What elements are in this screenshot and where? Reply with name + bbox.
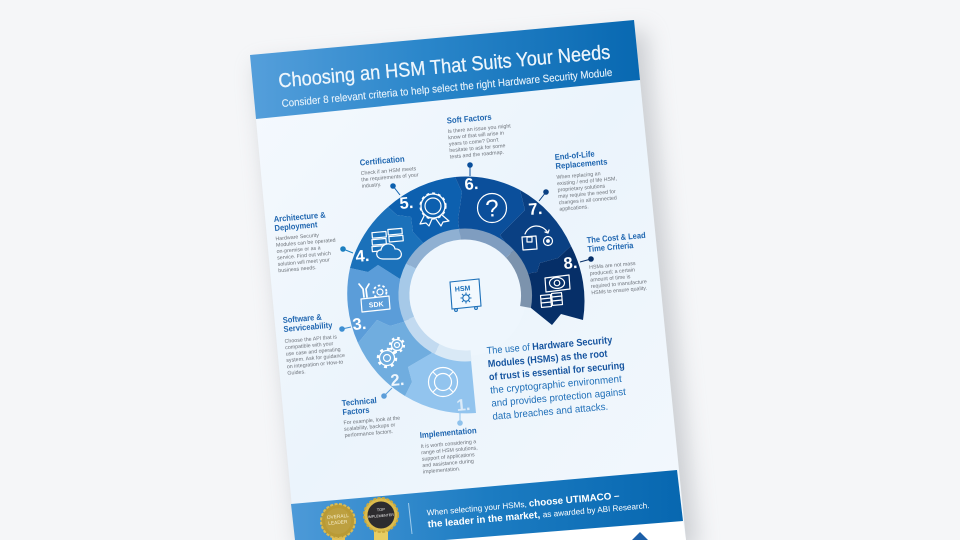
- text: main statement: Modules (HSMs) as the root: [487, 349, 609, 370]
- badge: top implementer: [364, 498, 398, 540]
- number 2: 2.: [390, 371, 405, 390]
- subtitle: Consider 8 relevant criteria to help select the right Hardware Security Module: [281, 67, 613, 110]
- text: implementation: and assistance during: [422, 459, 474, 469]
- badge: top implementer: TOP: [377, 507, 385, 512]
- text: software: [282, 310, 346, 377]
- text: implementation: range of HSM solutions,: [421, 445, 478, 456]
- number 1: 1.: [456, 396, 471, 415]
- icon: SDK toolbox: SDK: [369, 301, 384, 309]
- text: implementation: implementation.: [423, 466, 461, 475]
- pin 1: [458, 413, 462, 425]
- icon: HSM safe: HSM: [455, 285, 471, 294]
- text: cost and lead time: produced; a certain: [589, 267, 635, 277]
- segment 3: [347, 265, 410, 343]
- text: cost and lead time: Time Criteria: [587, 240, 634, 254]
- text: soft factors: years to come? Don't: [449, 137, 499, 148]
- text: main statement: The use of Hardware Security: [486, 335, 613, 357]
- text: architecture: Deployment: [274, 219, 318, 233]
- icon: gears: [378, 338, 404, 367]
- badge: overall leader: LEADER: [328, 519, 348, 527]
- text: certification: Certification: [359, 154, 405, 167]
- pin 4: [341, 247, 353, 253]
- icon: banknote and coins: [540, 275, 570, 307]
- segment 2: [358, 320, 432, 396]
- divider: [408, 503, 412, 534]
- text: main statement: [486, 334, 628, 423]
- text: architecture: Modules can be operated: [276, 238, 336, 249]
- banner text: as awarded by ABI Research.: [542, 501, 650, 519]
- icon: box replacement: [522, 226, 552, 250]
- pin 5: [391, 184, 400, 195]
- text: end-of-life: End-of-Life: [554, 149, 595, 162]
- pin 3: [340, 327, 351, 331]
- text: implementation: Implementation: [419, 425, 477, 440]
- text: main statement: data breaches and attacks.: [492, 402, 609, 423]
- text: software: compatible with your: [285, 341, 334, 351]
- text: cost and lead time: required to manufacture: [591, 279, 647, 290]
- text: implementation: support of applications: [422, 452, 475, 463]
- segment 4: [350, 207, 425, 279]
- text: implementation: [419, 425, 480, 475]
- text: architecture: business needs.: [278, 265, 317, 274]
- text: architecture: Hardware Security: [275, 233, 320, 242]
- badge: overall leader: OVERALL: [327, 513, 350, 521]
- text: end-of-life: existing / end of life HSM,: [557, 176, 617, 187]
- text: soft factors: Is there an issue you might: [447, 123, 512, 135]
- number 5: 5.: [399, 194, 414, 213]
- text: software: Choose the API that is: [284, 334, 337, 345]
- text: architecture: solution will meet your: [277, 257, 330, 268]
- inner ring: [404, 234, 527, 356]
- text: soft factors: Soft Factors: [446, 112, 492, 125]
- text: end-of-life: [554, 147, 619, 213]
- text: architecture: Architecture &: [273, 209, 326, 224]
- text: cost and lead time: [586, 230, 650, 296]
- page sheet: [250, 20, 686, 540]
- text: certification: industry.: [362, 182, 382, 190]
- pin 6: [468, 163, 472, 176]
- icon: lifebuoy: [428, 368, 458, 396]
- text: end-of-life: may require the need for: [558, 189, 616, 200]
- segment 8: [520, 246, 585, 325]
- icon: HSM safe: [450, 279, 481, 311]
- icon: question mark: ?: [484, 195, 500, 223]
- pin 7: [539, 190, 548, 201]
- text: cost and lead time: amount of time is: [590, 274, 631, 284]
- text: technical factors: [341, 393, 402, 439]
- text: technical factors: Technical: [341, 395, 377, 408]
- text: end-of-life: applications.: [559, 204, 589, 213]
- segment 7: [500, 190, 571, 275]
- title: Choosing an HSM That Suits Your Needs: [278, 42, 611, 92]
- text: main statement: of trust is essential for securing: [489, 360, 625, 383]
- text: end-of-life: Replacements: [555, 156, 608, 171]
- text: implementation: It is worth considering a: [421, 439, 477, 450]
- text: software: Software &: [282, 312, 322, 325]
- text: end-of-life: changes in all connected: [559, 195, 617, 206]
- text: certification: the requirements of your: [361, 172, 419, 183]
- segment 5: [388, 177, 462, 245]
- text: soft factors: tests and the roadmap.: [450, 150, 504, 160]
- text: technical factors: Factors: [342, 405, 370, 417]
- header band: [250, 20, 640, 119]
- number 3: 3.: [352, 315, 367, 334]
- number 6: 6.: [464, 175, 479, 194]
- text: software: use case and operating: [286, 347, 341, 358]
- text: soft factors: hesitate to ask for some: [449, 143, 506, 154]
- number 4: 4.: [355, 247, 370, 266]
- text: soft factors: [446, 110, 514, 160]
- inner disc: [404, 234, 526, 356]
- segmented ring chart: [347, 177, 585, 413]
- text: main statement: and provides protection against: [491, 387, 627, 410]
- number 7: 7.: [528, 200, 543, 219]
- page shadow: [256, 30, 698, 540]
- text: technical factors: performance factors.: [344, 429, 393, 439]
- pin 8: [580, 257, 593, 262]
- text: main statement: the cryptographic environment: [490, 374, 622, 396]
- text: software: Serviceability: [283, 320, 333, 334]
- footer white strip: [445, 521, 686, 540]
- badge: overall leader: [321, 504, 355, 540]
- text: software: on integration or How-to: [287, 360, 344, 370]
- icon: award rosette: [420, 193, 449, 226]
- icon: servers and cloud: [372, 228, 403, 259]
- text: architecture: on-premise or as a: [276, 245, 321, 255]
- text: technical factors: scalability, backups or: [344, 422, 396, 433]
- icon: SDK toolbox: [359, 284, 390, 312]
- segment 1: [405, 345, 476, 413]
- banner text: [426, 488, 650, 530]
- icon: footer diamond: [632, 532, 648, 540]
- text: technical factors: For example, look at the: [343, 415, 400, 426]
- text: software: Guides.: [287, 369, 306, 377]
- text: cost and lead time: The Cost & Lead: [586, 230, 646, 245]
- text: soft factors: know of that will arise in: [448, 130, 504, 141]
- text: end-of-life: proprietary solutions: [557, 184, 606, 194]
- pin 2: [382, 388, 392, 398]
- badge: top implementer: IMPLEMENTER: [368, 513, 394, 519]
- text: cost and lead time: HSMs to ensure quality.: [591, 286, 647, 296]
- text: architecture: [273, 209, 338, 274]
- text: certification: [359, 153, 420, 190]
- text: cost and lead time: HSMs are not mass: [589, 261, 636, 271]
- icon: question mark: [478, 194, 506, 223]
- text: certification: Check if an HSM meets: [360, 166, 417, 177]
- text: software: system. Ask for guidance: [286, 353, 345, 364]
- text: end-of-life: When replacing an: [556, 171, 601, 181]
- number 8: 8.: [563, 254, 578, 273]
- banner text: When selecting your HSMs, choose UTIMACO –: [426, 491, 620, 517]
- footer banner: [291, 470, 683, 540]
- segment 6: [455, 177, 525, 245]
- banner text: the leader in the market,: [427, 509, 543, 530]
- text: architecture: service. Find out which: [277, 251, 331, 262]
